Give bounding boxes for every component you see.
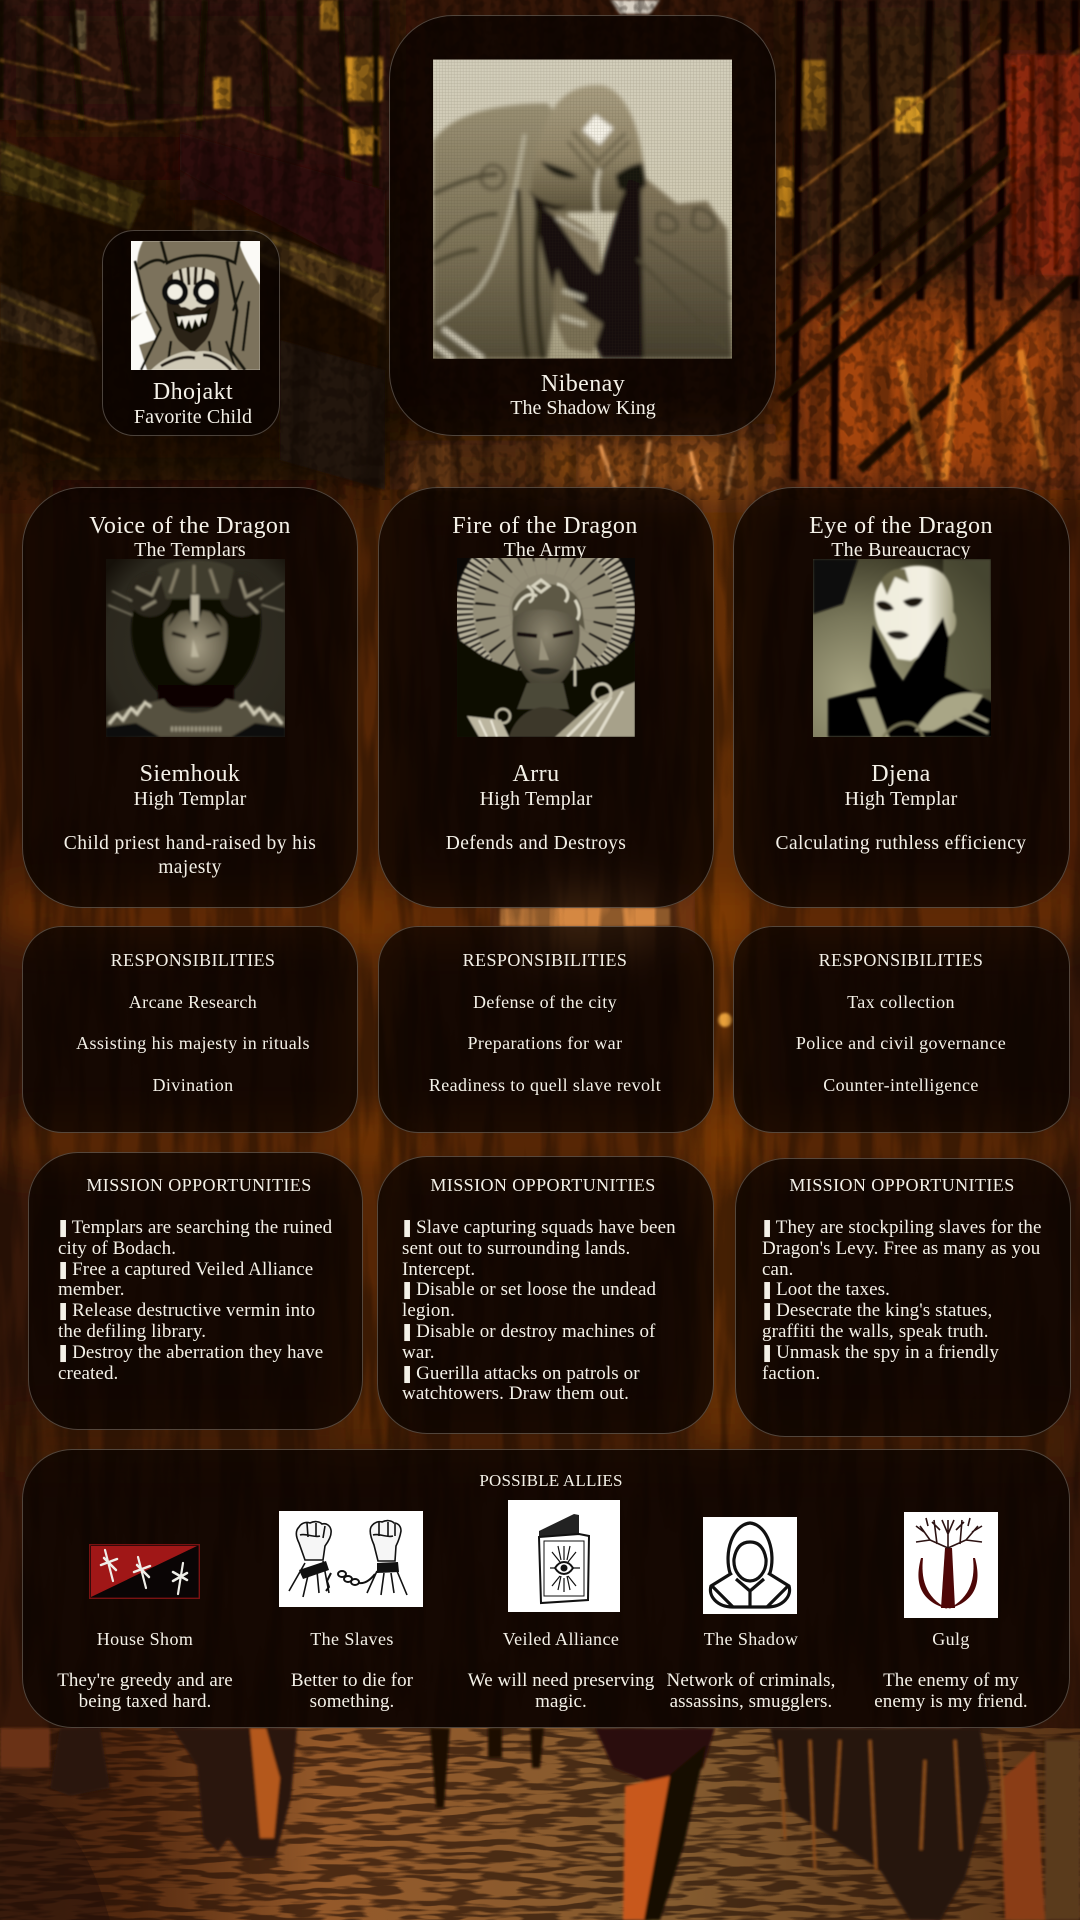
ally description: The Shadow: assassins, smugglers. bbox=[670, 1691, 832, 1712]
heading: responsibilities: RESPONSIBILITIES bbox=[463, 950, 627, 970]
title: The Shadow King: The Shadow King bbox=[510, 397, 656, 419]
ally description: Veiled Alliance: We will need preserving bbox=[468, 1670, 654, 1691]
panel: responsibilities, Bureaucracy bbox=[733, 926, 1070, 1133]
mission list: ❚ Disable or destroy machines of bbox=[400, 1321, 655, 1342]
mission list: city of Bodach. bbox=[58, 1238, 176, 1259]
name: Nibenay: Nibenay bbox=[541, 371, 625, 397]
mission list: ❚ Slave capturing squads have been bbox=[400, 1217, 676, 1238]
mission list: war. bbox=[402, 1342, 435, 1363]
panel: mission opportunities, Bureaucracy bbox=[735, 1158, 1071, 1437]
ally description: The Slaves: Better to die for bbox=[291, 1670, 413, 1691]
description: majesty bbox=[158, 856, 222, 878]
mission list: legion. bbox=[402, 1300, 455, 1321]
mission list: graffiti the walls, speak truth. bbox=[762, 1321, 989, 1342]
mission list: can. bbox=[762, 1259, 794, 1280]
role: High Templar: High Templar bbox=[480, 788, 592, 810]
ally description: Veiled Alliance bbox=[468, 1670, 654, 1712]
panel: mission opportunities, Army bbox=[377, 1156, 714, 1434]
floor bbox=[0, 1728, 1080, 1920]
name: Dhojakt: Dhojakt bbox=[153, 379, 233, 405]
heading: responsibilities: RESPONSIBILITIES bbox=[819, 950, 983, 970]
name: Djena: Djena bbox=[871, 761, 931, 787]
lattice top-right bbox=[895, 97, 923, 133]
portrait: Nibenay bbox=[433, 60, 732, 359]
heading: Voice of the Dragon: Voice of the Dragon bbox=[89, 513, 291, 539]
windows and lattice top-left bbox=[213, 0, 383, 155]
item: defense: Defense of the city bbox=[473, 992, 617, 1012]
mission list: watchtowers. Draw them out. bbox=[402, 1383, 629, 1404]
item: rituals: Assisting his majesty in rituals bbox=[76, 1033, 310, 1053]
item: police: Police and civil governance bbox=[796, 1033, 1006, 1053]
figures on street bbox=[50, 1728, 110, 1796]
panel: mission opportunities, Templars bbox=[28, 1152, 363, 1430]
panel: Dhojakt bbox=[102, 230, 280, 436]
ally description: The Slaves: something. bbox=[310, 1691, 394, 1712]
item: arcane research: Arcane Research bbox=[129, 992, 257, 1012]
ally description: Gulg: enemy is my friend. bbox=[874, 1691, 1028, 1712]
heading: Eye of the Dragon: Eye of the Dragon bbox=[809, 513, 993, 539]
panel: Eye of the Dragon bbox=[733, 487, 1070, 908]
icon: Veiled Alliance eye book bbox=[508, 1500, 620, 1612]
ally label: Gulg: Gulg bbox=[932, 1629, 970, 1649]
mission list: ❚ Desecrate the king's statues, bbox=[760, 1300, 992, 1321]
description: Child priest hand-raised by his bbox=[64, 833, 316, 854]
subheading: The Bureaucracy: The Bureaucracy bbox=[831, 539, 971, 561]
mission list: sent out to surrounding lands. bbox=[402, 1238, 630, 1259]
item: divination: Divination bbox=[152, 1075, 234, 1095]
heading: mission opportunities: MISSION OPPORTUNITIES bbox=[430, 1175, 656, 1195]
mission list: ❚ Unmask the spy in a friendly bbox=[760, 1342, 999, 1363]
description: Defends and Destroys bbox=[446, 833, 626, 854]
description: Calculating ruthless efficiency bbox=[776, 833, 1026, 854]
ally label: The Shadow: The Shadow bbox=[704, 1629, 798, 1649]
icon: Gulg tree bbox=[904, 1512, 998, 1618]
panel: Fire of the Dragon bbox=[378, 487, 714, 908]
description bbox=[64, 833, 316, 878]
ally label: House Shom: House Shom bbox=[97, 1629, 193, 1649]
mission list: created. bbox=[58, 1363, 118, 1384]
item: counter-intelligence: Counter-intelligence bbox=[823, 1075, 979, 1095]
panel: possible allies bbox=[22, 1449, 1070, 1728]
subheading: The Army: The Army bbox=[504, 539, 586, 561]
mission list: ❚ Release destructive vermin into bbox=[56, 1300, 315, 1321]
mission list: ❚ Loot the taxes. bbox=[760, 1279, 890, 1300]
mission list: ❚ Destroy the aberration they have bbox=[56, 1342, 323, 1363]
gap highlights bbox=[500, 908, 670, 926]
mission list bbox=[56, 1217, 332, 1384]
mission list: member. bbox=[58, 1279, 125, 1300]
panel: Voice of the Dragon bbox=[22, 487, 358, 908]
mission list: ❚ Free a captured Veiled Alliance bbox=[56, 1259, 313, 1280]
mission list: the defiling library. bbox=[58, 1321, 206, 1342]
heading: Fire of the Dragon: Fire of the Dragon bbox=[452, 513, 638, 539]
role: High Templar: High Templar bbox=[134, 788, 246, 810]
item: preparations: Preparations for war bbox=[468, 1033, 622, 1053]
ally description: Gulg bbox=[874, 1670, 1028, 1712]
mission list: ❚ Templars are searching the ruined bbox=[56, 1217, 332, 1238]
item: tax collection: Tax collection bbox=[847, 992, 955, 1012]
name: Arru: Arru bbox=[512, 761, 560, 787]
mission list: ❚ Disable or set loose the undead bbox=[400, 1279, 656, 1300]
icon: The Slaves broken chains bbox=[279, 1511, 423, 1607]
portrait: Dhojakt bbox=[131, 241, 260, 370]
portrait: Arru bbox=[457, 558, 635, 737]
mission list bbox=[760, 1217, 1041, 1384]
icon: House Shom flag bbox=[89, 1544, 200, 1599]
ally description: The Slaves bbox=[291, 1670, 413, 1712]
mission list: ❚ They are stockpiling slaves for the bbox=[760, 1217, 1041, 1238]
panel: responsibilities, Templars bbox=[22, 926, 358, 1133]
portrait: Djena bbox=[813, 559, 991, 737]
ally label: Veiled Alliance: Veiled Alliance bbox=[503, 1629, 619, 1649]
role: Favorite Child: Favorite Child bbox=[134, 406, 252, 428]
item: readiness: Readiness to quell slave revolt bbox=[429, 1075, 661, 1095]
mission list bbox=[400, 1217, 676, 1404]
mission list: Intercept. bbox=[402, 1259, 475, 1280]
ally description: House Shom: They're greedy and are bbox=[57, 1670, 233, 1691]
ally label: The Slaves: The Slaves bbox=[310, 1629, 394, 1649]
icon: The Shadow hooded figure bbox=[703, 1517, 797, 1614]
heading: mission opportunities: MISSION OPPORTUNITIES bbox=[789, 1175, 1015, 1195]
ally description: The Shadow bbox=[667, 1670, 835, 1712]
name: Siemhouk: Siemhouk bbox=[140, 761, 240, 787]
heading: possible allies: POSSIBLE ALLIES bbox=[479, 1471, 623, 1490]
panel: Nibenay bbox=[389, 15, 776, 436]
heading: responsibilities: RESPONSIBILITIES bbox=[111, 950, 275, 970]
ally description: The Shadow: Network of criminals, bbox=[667, 1670, 835, 1691]
ally description: Gulg: The enemy of my bbox=[883, 1670, 1019, 1691]
portrait: Siemhouk bbox=[106, 559, 285, 737]
ally description: House Shom bbox=[57, 1670, 233, 1712]
mission list: Dragon's Levy. Free as many as you bbox=[762, 1238, 1040, 1259]
role: High Templar: High Templar bbox=[845, 788, 957, 810]
mission list: faction. bbox=[762, 1363, 820, 1384]
heading: mission opportunities: MISSION OPPORTUNITIES bbox=[86, 1175, 312, 1195]
panel: responsibilities, Army bbox=[378, 926, 714, 1133]
ally description: Veiled Alliance: magic. bbox=[535, 1691, 587, 1712]
ally description: House Shom: being taxed hard. bbox=[79, 1691, 211, 1712]
mission list: ❚ Guerilla attacks on patrols or bbox=[400, 1363, 640, 1384]
subheading: The Templars: The Templars bbox=[134, 539, 246, 561]
